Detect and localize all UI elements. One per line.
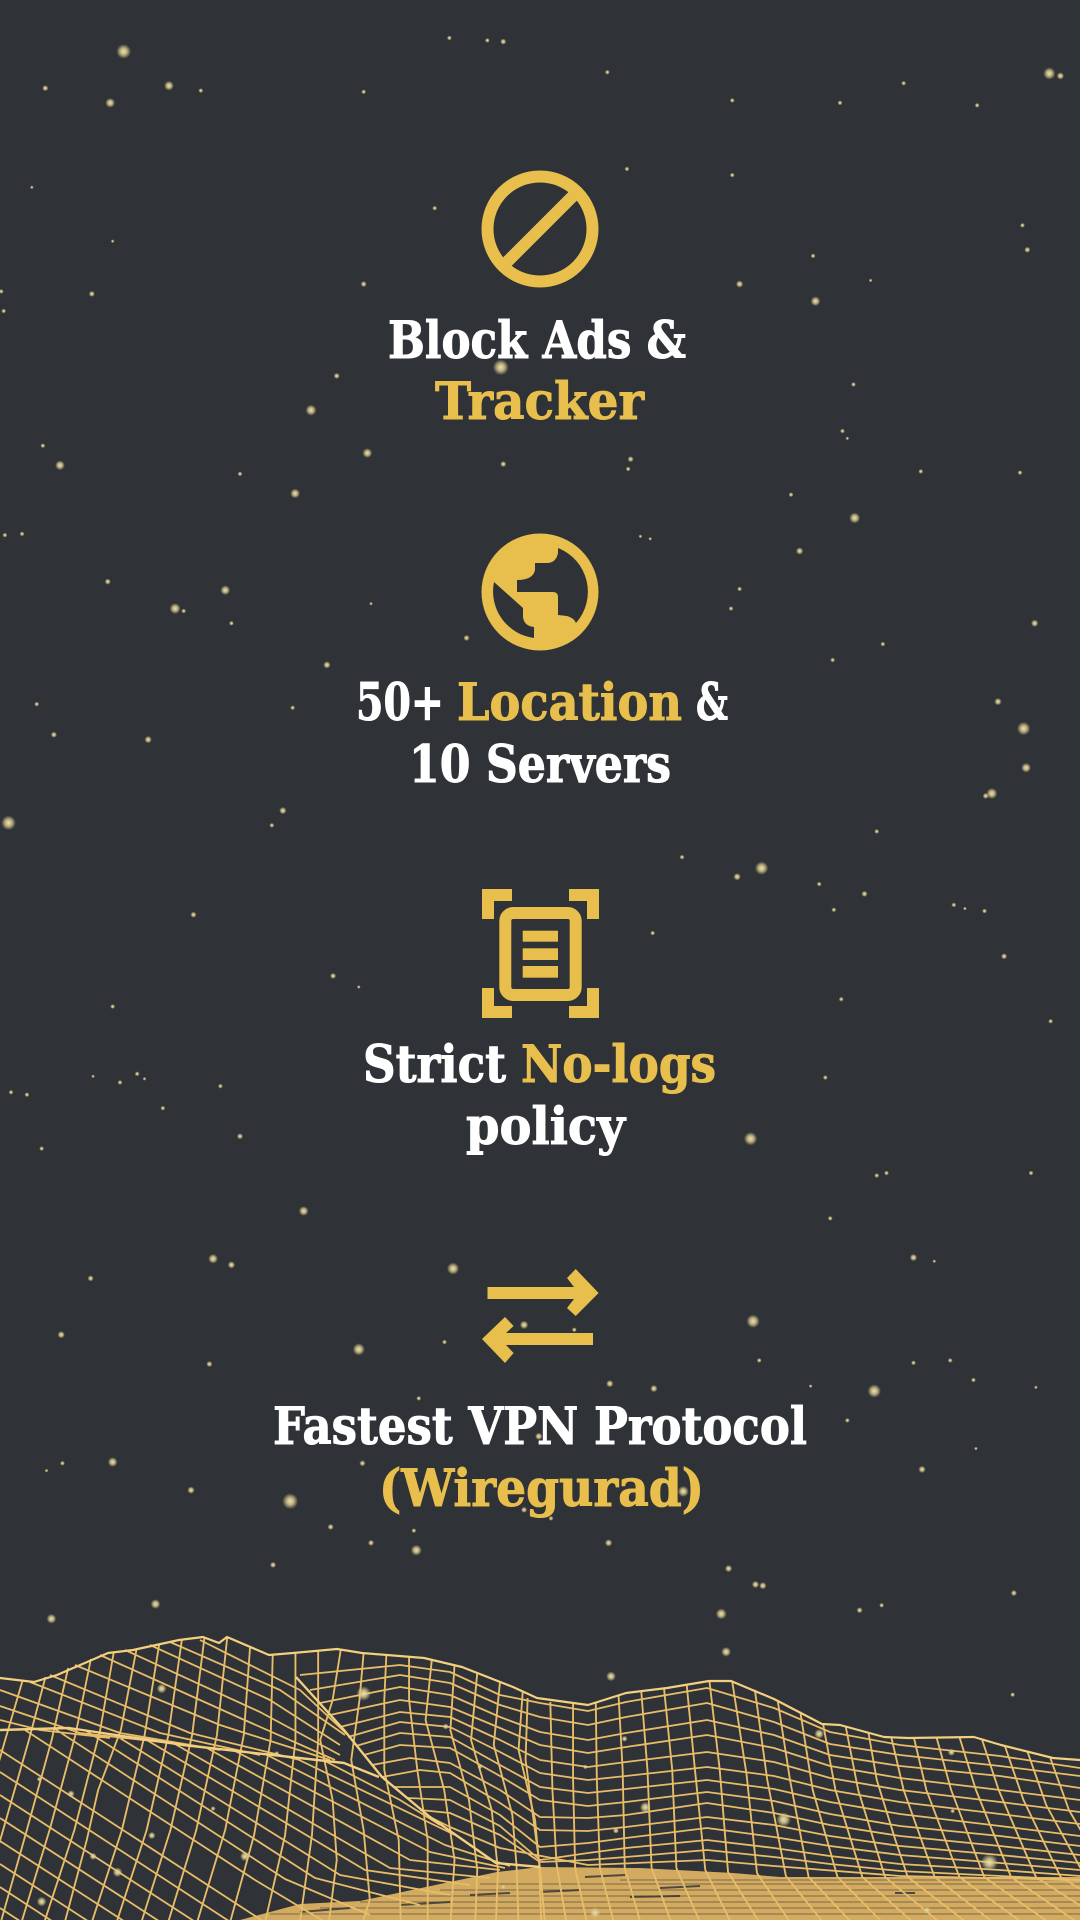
panel: locations and servers: [356, 534, 728, 795]
heading: block ads: Block Ads &: [388, 311, 686, 371]
heading: wiregurad: (Wiregurad): [379, 1459, 704, 1519]
heading: no-logs: No-logs: [521, 1035, 716, 1095]
heading: 10 servers: 10 Servers: [409, 735, 671, 795]
heading: ampersand: &: [696, 673, 728, 733]
wireframe mountain: [0, 1637, 1080, 1920]
icon: globe: [482, 534, 598, 650]
panel: block ads and tracker: [388, 176, 686, 432]
heading: fastest vpn protocol: Fastest VPN Protocol: [273, 1397, 807, 1457]
panel: no-logs policy: [363, 889, 716, 1157]
icon: prohibited sign: [488, 176, 592, 282]
icon: exchange arrows: [482, 1269, 599, 1363]
heading: tracker: Tracker: [435, 372, 645, 432]
panel: fastest protocol: [273, 1269, 807, 1519]
heading: policy: policy: [466, 1097, 626, 1157]
heading: location: Location: [457, 673, 682, 733]
heading: 50+: 50+: [356, 673, 444, 733]
heading: strict: Strict: [363, 1035, 506, 1095]
icon: document in frame: [482, 889, 599, 1018]
